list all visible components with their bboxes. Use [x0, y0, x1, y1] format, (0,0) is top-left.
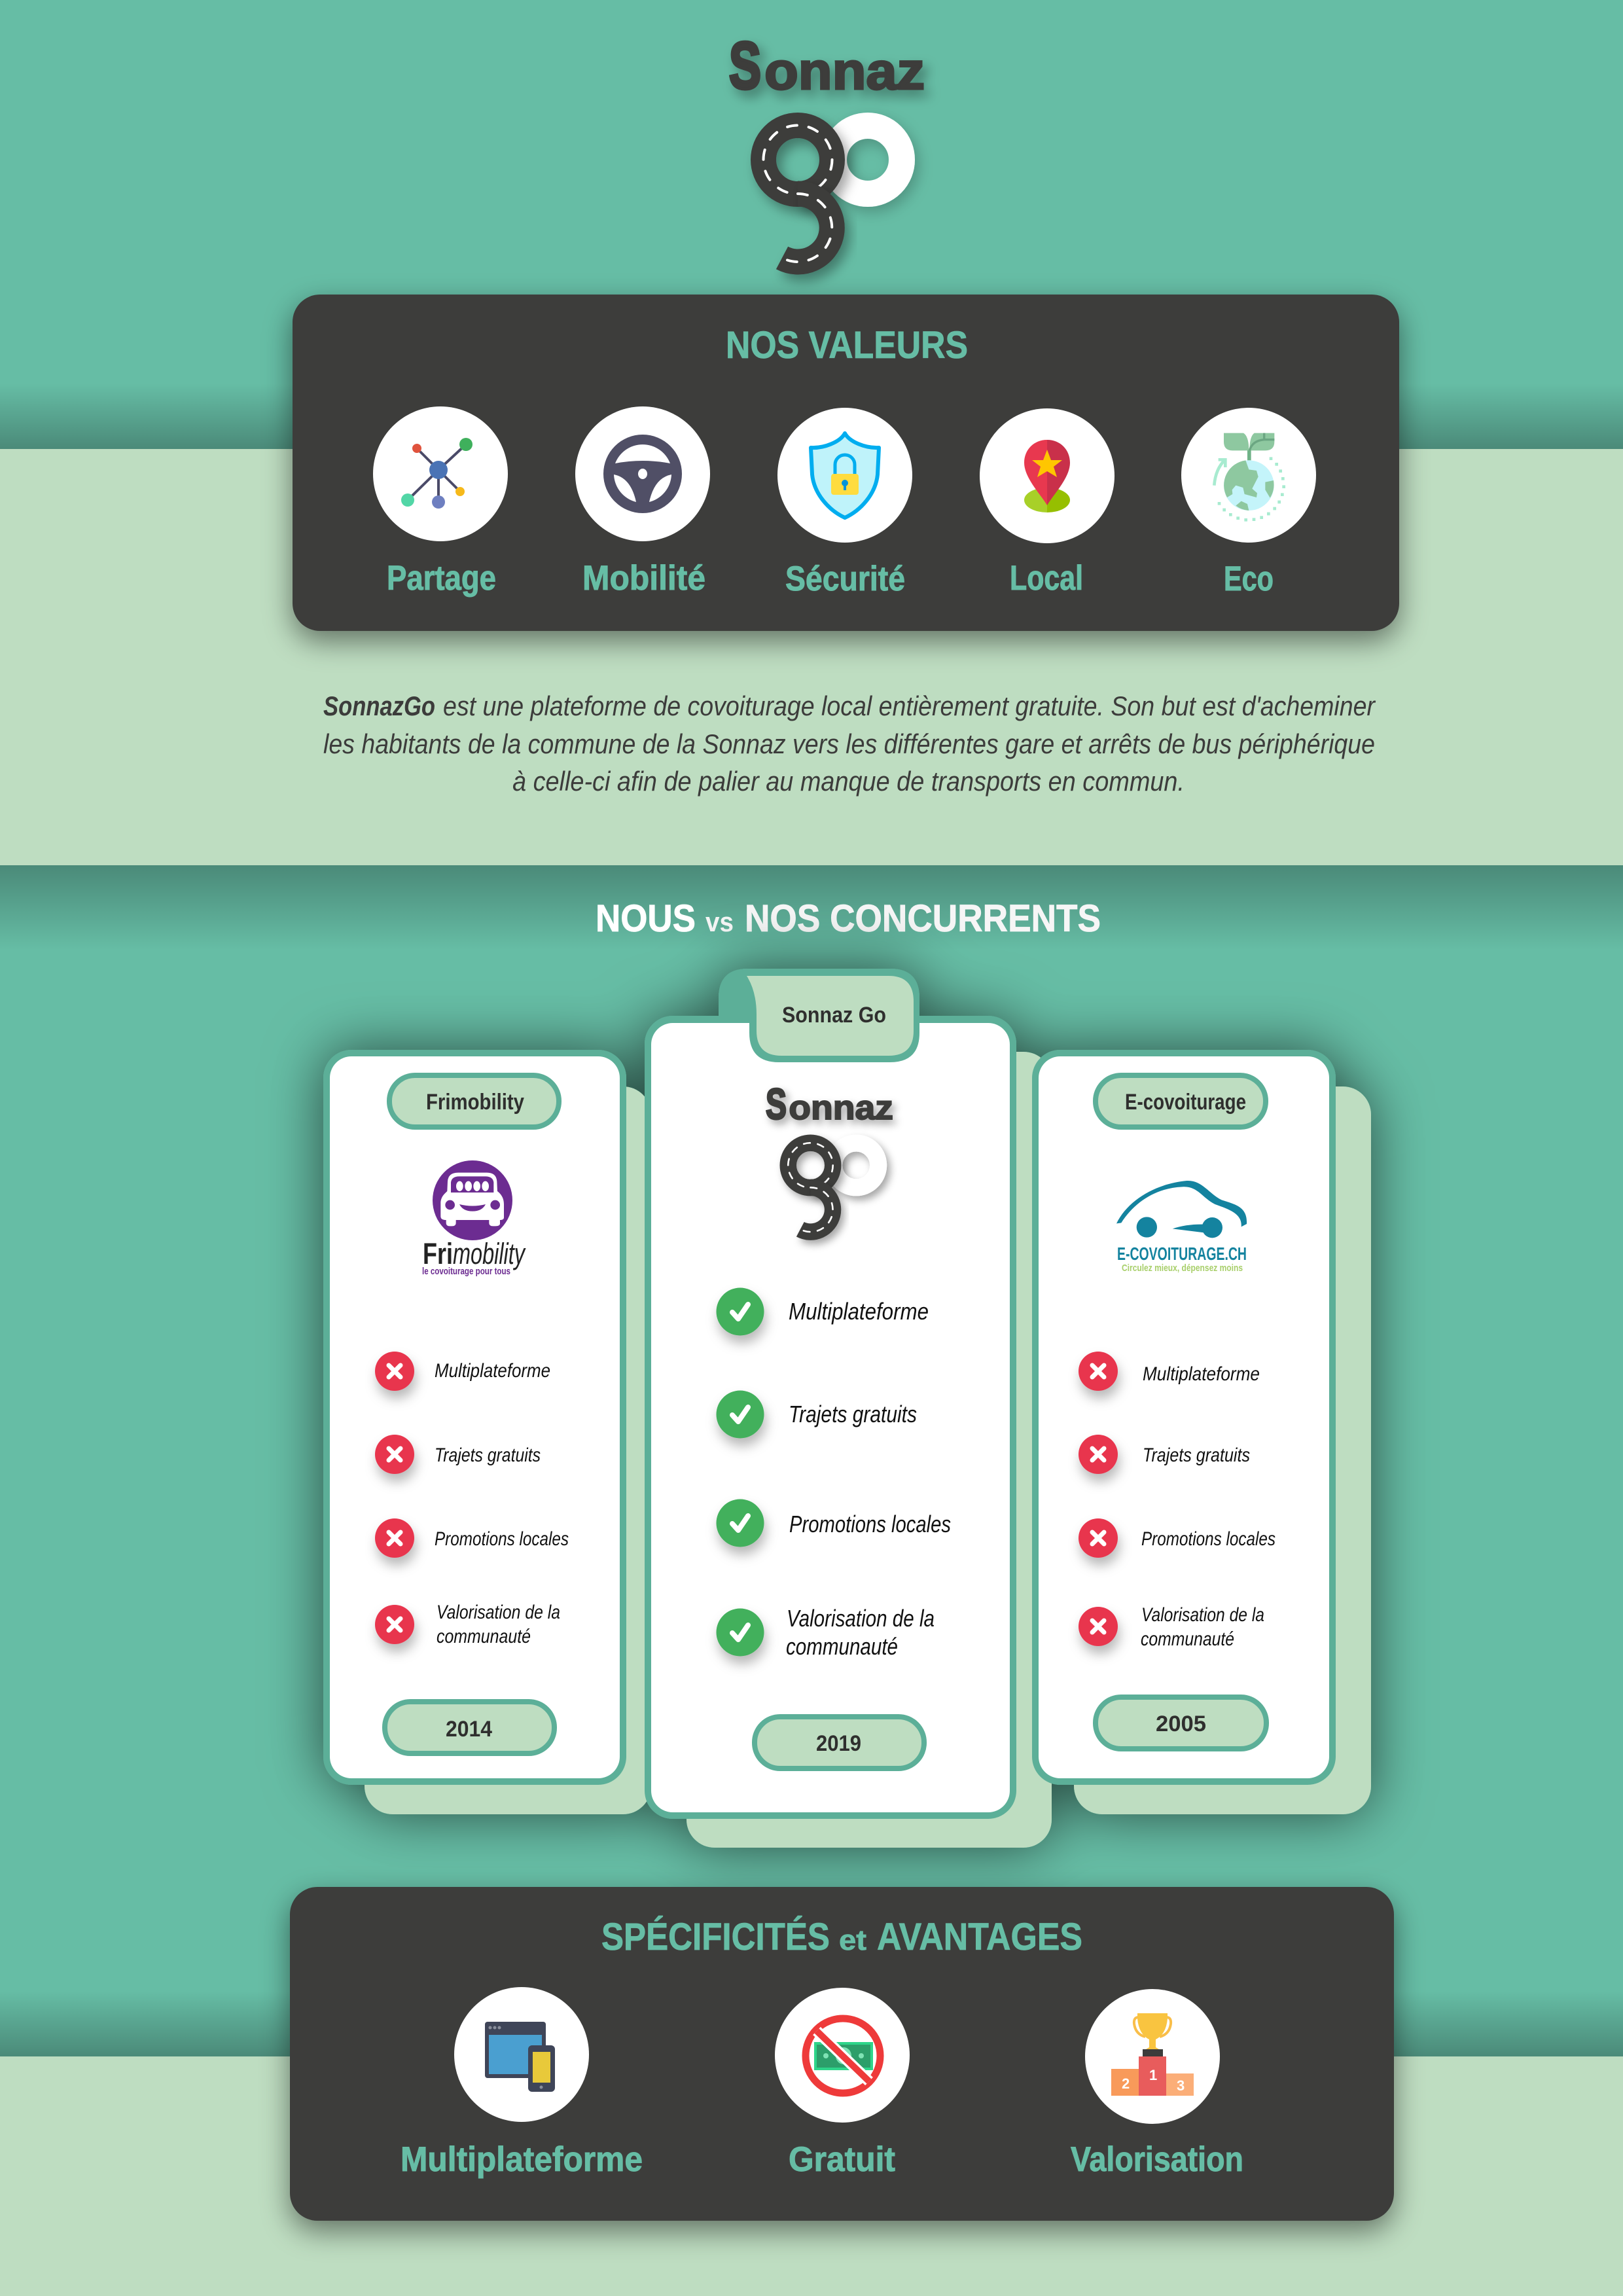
- feature text: Valorisation de la: [437, 1602, 560, 1623]
- logo: e-covoiturage: Circulez mieux, dépensez moins: [1122, 1263, 1243, 1274]
- logo wordmark: onnaz: [764, 42, 925, 100]
- feature text: Promotions locales: [435, 1528, 569, 1550]
- cross: promotions locales: [1079, 1518, 1118, 1558]
- icon: network: [401, 438, 473, 509]
- logo wordmark: [729, 29, 925, 103]
- icon: trophy on podium: 3: [1177, 2077, 1185, 2094]
- value: securite: [777, 408, 912, 598]
- feature text: [1141, 1604, 1264, 1650]
- icon: trophy on podium: 2: [1122, 2075, 1130, 2092]
- tab: sonnaz go: [747, 976, 919, 1062]
- feature text: Trajets gratuits: [1143, 1444, 1250, 1466]
- feature text: Multiplateforme: [789, 1298, 929, 1325]
- logo: frimobility: Fri: [423, 1237, 453, 1270]
- check: promotions locales: [716, 1499, 764, 1547]
- icon: tablet and phone: [485, 2022, 555, 2092]
- feature text: communauté: [1141, 1628, 1234, 1650]
- icon: car outline: [1116, 1181, 1247, 1238]
- text block: introduction: à celle-ci afin de palier au manque de transports en commun.: [512, 766, 1185, 797]
- icon: map pin with star: [1024, 440, 1070, 512]
- value: eco: [1181, 408, 1316, 598]
- value: local: Local: [1010, 559, 1083, 598]
- tab: sonnaz go: Sonnaz Go: [782, 1003, 886, 1028]
- pill: year 2005: 2005: [1156, 1712, 1206, 1736]
- check: multiplateforme: [716, 1288, 764, 1335]
- cross: valorisation: [375, 1605, 414, 1644]
- feature text: [786, 1605, 935, 1660]
- pill: year 2014: 2014: [446, 1717, 492, 1742]
- panel: specificites et avantages: [290, 1887, 1394, 2221]
- cross: trajets gratuits: [1079, 1435, 1118, 1474]
- pill: year 2019: 2019: [816, 1731, 861, 1756]
- cross: multiplateforme: [375, 1352, 414, 1391]
- check: trajets gratuits: [716, 1390, 764, 1439]
- pill: year 2019: [755, 1717, 924, 1768]
- logo: sonnaz go small: S: [766, 1079, 787, 1128]
- text block: introduction: [323, 691, 1376, 797]
- benefit: multiplateforme: Multiplateforme: [401, 2140, 643, 2179]
- benefit: multiplateforme: [401, 1987, 643, 2179]
- cross: multiplateforme: [1079, 1352, 1118, 1391]
- pill: e-covoiturage: E-covoiturage: [1125, 1090, 1246, 1115]
- feature text: [437, 1602, 560, 1647]
- icon: globe with sprout: [1214, 433, 1284, 520]
- value: mobilite: [575, 406, 710, 598]
- panel: sonnaz go card: [645, 969, 1016, 1819]
- cross: promotions locales: [375, 1518, 414, 1558]
- heading: specificites et avantages: [601, 1916, 1082, 1958]
- feature text: Valorisation de la: [787, 1605, 935, 1632]
- icon: car face: [440, 1173, 504, 1226]
- cross: trajets gratuits: [375, 1435, 414, 1474]
- pill: year 2014: [385, 1702, 554, 1753]
- feature text: Multiplateforme: [1143, 1363, 1260, 1385]
- text block: introduction: SonnazGo: [323, 691, 435, 721]
- logo: sonnaz go small: onnaz: [789, 1089, 893, 1127]
- pill: frimobility: Frimobility: [426, 1090, 524, 1115]
- value: mobilite: Mobilité: [582, 559, 705, 598]
- value: partage: Partage: [387, 559, 496, 598]
- heading: nos valeurs: NOS VALEURS: [726, 324, 968, 367]
- icon: trophy on podium: [1111, 2013, 1194, 2096]
- benefit: valorisation: Valorisation: [1071, 2140, 1243, 2179]
- heading: nous vs nos concurrents: NOS CONCURRENTS: [745, 897, 1101, 940]
- logo: sonnaz go small: [766, 1079, 893, 1232]
- cross: valorisation: [1079, 1607, 1118, 1646]
- panel: e-covoiturage card: [1032, 1050, 1371, 1814]
- feature text: Trajets gratuits: [789, 1401, 917, 1427]
- value: securite: Sécurité: [785, 560, 905, 598]
- logo: frimobility: le covoiturage pour tous: [422, 1266, 510, 1277]
- value: partage: [373, 406, 508, 598]
- logo: Sonnaz Go header: [729, 29, 925, 262]
- heading: specificites et avantages: et: [839, 1924, 866, 1956]
- heading: specificites et avantages: AVANTAGES: [877, 1916, 1082, 1958]
- pill: e-covoiturage: [1096, 1075, 1266, 1127]
- pill: year 2005: [1096, 1697, 1266, 1749]
- value: local: [980, 408, 1115, 598]
- heading: specificites et avantages: SPÉCIFICITÉS: [601, 1916, 830, 1958]
- list: frimobility features: [375, 1352, 569, 1647]
- benefit: gratuit: [775, 1988, 910, 2179]
- panel: nos valeurs: [293, 295, 1399, 631]
- feature text: Promotions locales: [1141, 1528, 1275, 1550]
- check: valorisation: [716, 1609, 764, 1656]
- card shadows: [323, 969, 1371, 1848]
- feature text: Valorisation de la: [1141, 1604, 1264, 1626]
- feature text: Multiplateforme: [435, 1360, 550, 1382]
- logo: frimobility: [422, 1160, 526, 1277]
- feature text: communauté: [786, 1633, 898, 1660]
- icon: trophy on podium: 1: [1149, 2067, 1157, 2083]
- pill: frimobility: [389, 1075, 559, 1127]
- feature text: Promotions locales: [789, 1511, 951, 1537]
- feature text: communauté: [437, 1626, 531, 1647]
- benefit: valorisation: [1071, 1989, 1243, 2179]
- heading: nous vs nos concurrents: [596, 897, 1101, 940]
- feature text: Trajets gratuits: [435, 1444, 541, 1466]
- text block: introduction: les habitants de la commune de la Sonnaz vers les différentes gare et arrêts de bus périphérique: [323, 728, 1375, 759]
- icon: crossed banknote: [806, 2018, 880, 2093]
- heading: nous vs nos concurrents: vs: [705, 906, 734, 937]
- benefit: gratuit: Gratuit: [789, 2140, 895, 2179]
- icon: steering wheel: [603, 435, 682, 513]
- heading: nous vs nos concurrents: NOUS: [596, 897, 696, 940]
- text block: introduction: est une plateforme de covoiturage local entièrement gratuite. Son but est d'acheminer: [443, 691, 1376, 721]
- icon: shield with padlock: [811, 433, 879, 518]
- list: sonnaz go features: [716, 1288, 951, 1660]
- list: e-covoiturage features: [1079, 1352, 1275, 1650]
- logo wordmark: S: [729, 29, 761, 103]
- back sheet: sonnaz go card: [687, 1052, 1052, 1848]
- panel: frimobility card: [323, 1050, 651, 1814]
- logo letter g road: [763, 126, 832, 262]
- logo letter o: [834, 126, 902, 194]
- value: eco: Eco: [1224, 560, 1274, 598]
- logo: e-covoiturage: [1116, 1181, 1247, 1274]
- logo: e-covoiturage: E-COVOITURAGE.CH: [1117, 1244, 1247, 1264]
- logo: frimobility: mobility: [453, 1237, 526, 1270]
